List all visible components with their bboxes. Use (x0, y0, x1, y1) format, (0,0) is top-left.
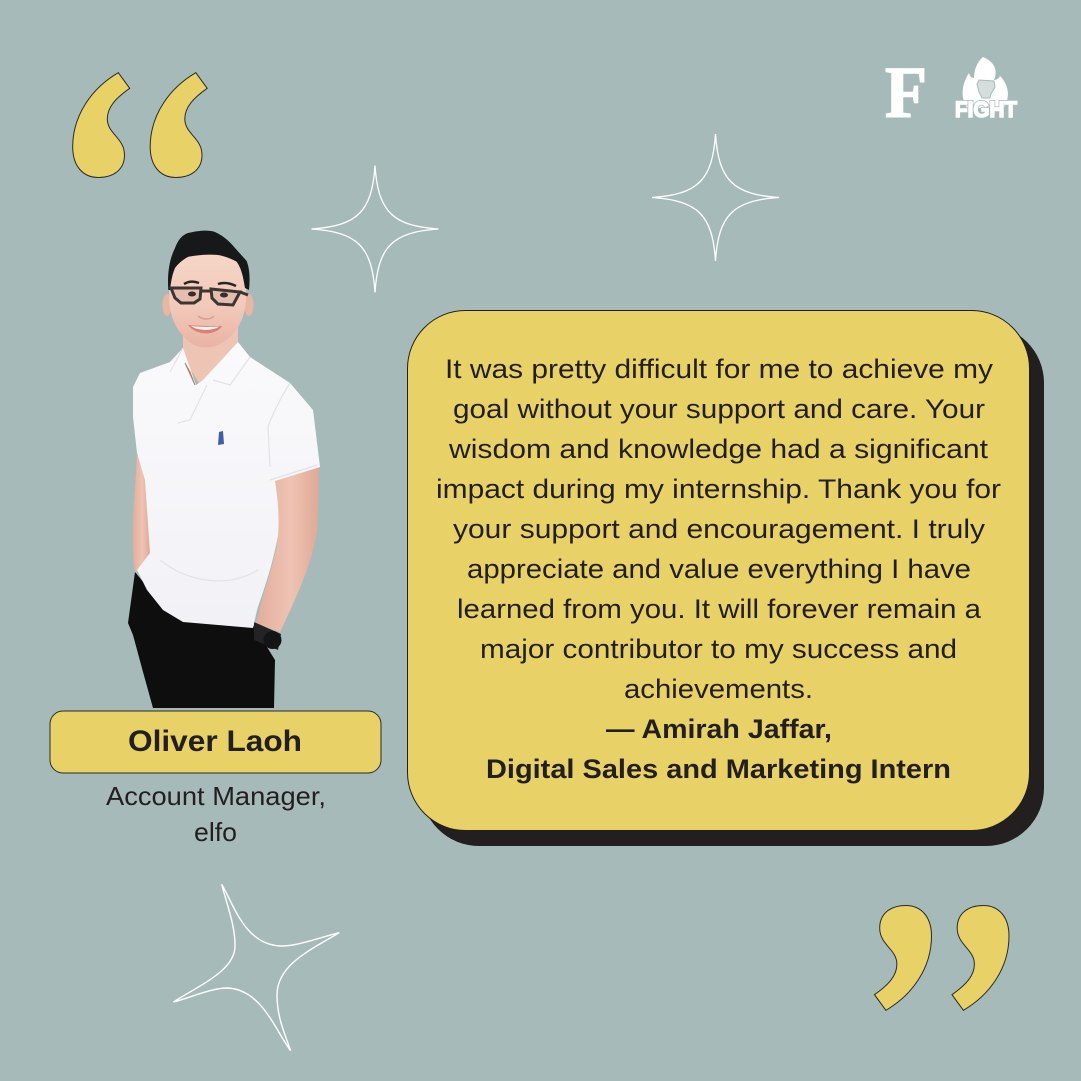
hair (168, 231, 250, 290)
polo shirt (133, 342, 320, 628)
job title: Account Manager, (106, 781, 326, 811)
trousers (128, 572, 275, 708)
quote text: wisdom and knowledge had a significant (448, 434, 989, 464)
job title (106, 781, 326, 847)
ears (162, 294, 254, 316)
attribution: — Amirah Jaffar, (606, 714, 832, 744)
smile (188, 325, 222, 333)
quote text: major contributor to my success and (480, 634, 957, 664)
logo mark on shirt (218, 431, 224, 445)
quote text: It was pretty difficult for me to achieve my (445, 354, 994, 384)
quote text: impact during my internship. Thank you for (436, 474, 1001, 504)
teeth (191, 326, 219, 330)
name: Oliver Laoh (128, 725, 302, 758)
face (169, 250, 246, 348)
icon: tilted sparkle star bottom (173, 884, 339, 1051)
name plate (50, 711, 381, 773)
quote text: goal without your support and care. Your (453, 394, 985, 424)
glasses (171, 288, 248, 305)
eyes (188, 292, 228, 298)
watch (254, 622, 282, 650)
quote card (408, 310, 1030, 830)
quote text: achievements. (624, 674, 813, 704)
quote text: appreciate and value everything I have (467, 554, 971, 584)
shirt shading (160, 348, 317, 581)
neck (183, 325, 238, 392)
logo: F: F (885, 52, 927, 133)
photo: Oliver Laoh (128, 231, 320, 708)
icon: opening quotation marks (73, 73, 207, 178)
eyebrows (184, 282, 236, 286)
quote text: your support and encouragement. I truly (453, 514, 986, 544)
icon: sparkle star right (652, 134, 779, 261)
quote text: learned from you. It will forever remain a (457, 594, 982, 624)
quote card shadow (421, 325, 1044, 846)
icon: sparkle star centre (312, 166, 438, 292)
nose (198, 316, 214, 319)
logo: FIGHT flame: FIGHT (955, 97, 1018, 122)
right arm (256, 466, 319, 632)
attribution (486, 714, 951, 784)
attribution: Digital Sales and Marketing Intern (486, 754, 951, 784)
logo: FIGHT flame: FIGHT (955, 97, 1018, 122)
job title: elfo (194, 817, 237, 847)
collar opening (185, 363, 195, 385)
left arm (133, 455, 150, 574)
icon: closing quotation marks (874, 906, 1009, 1010)
logo: FIGHT flame (955, 57, 1018, 122)
quote text (436, 354, 1001, 704)
